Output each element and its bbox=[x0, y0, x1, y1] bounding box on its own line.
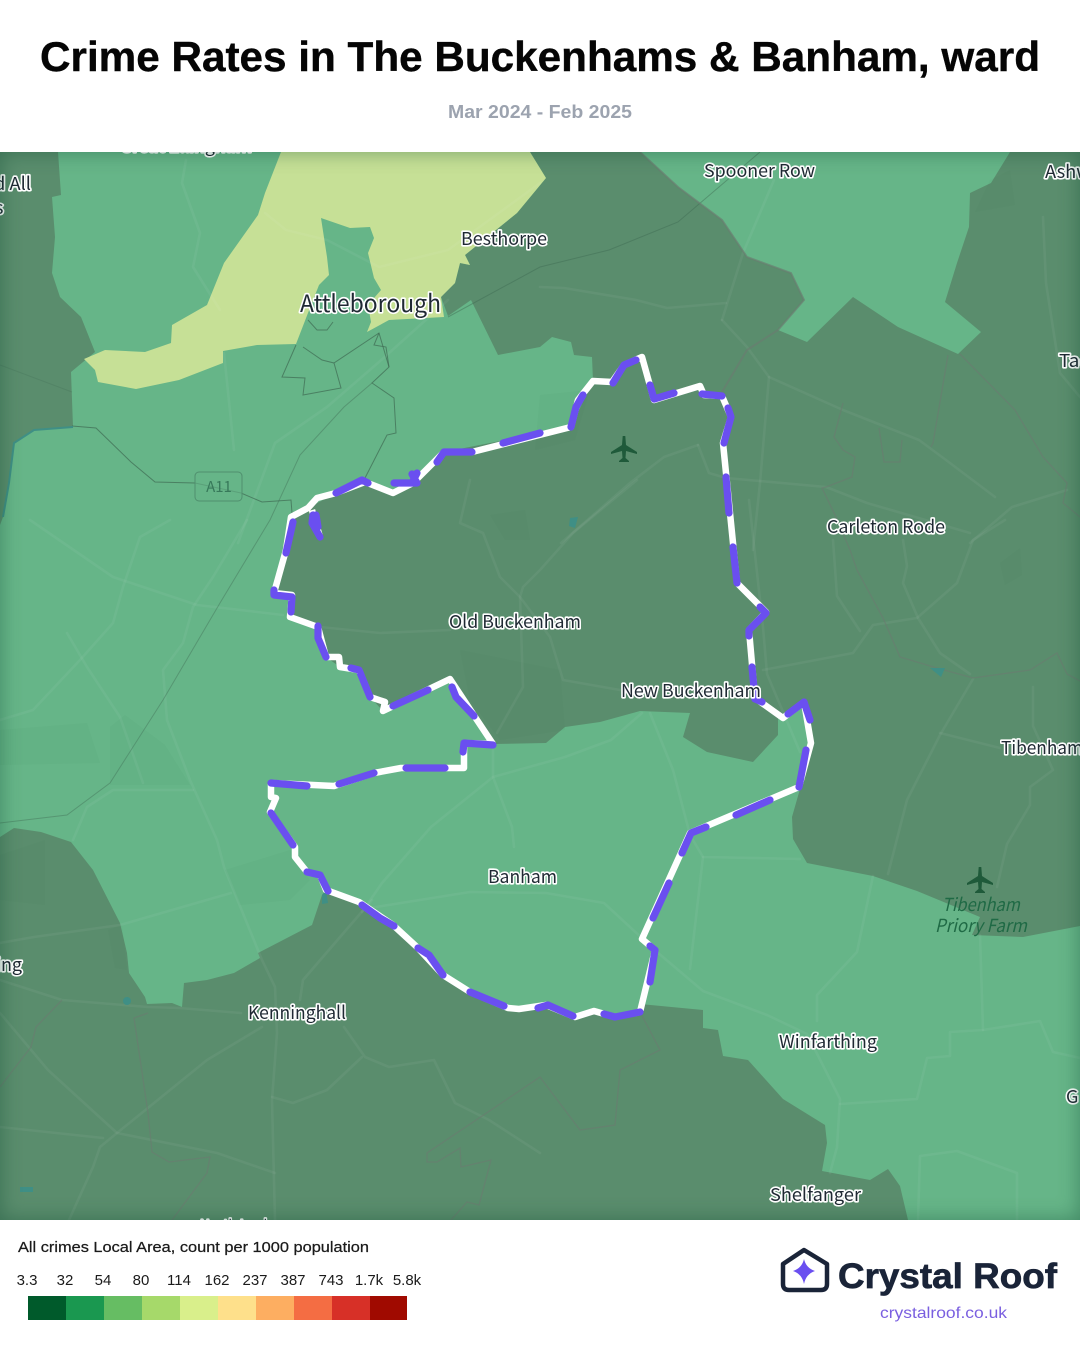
road shield: A11 bbox=[195, 472, 242, 501]
brand url: crystalroof.co.uk bbox=[880, 1305, 1008, 1322]
administrative boundary lines bbox=[0, 152, 760, 823]
place labels: Besthorpe bbox=[461, 225, 547, 251]
icon: airfield at Old Buckenham bbox=[611, 436, 637, 462]
legend scale values: 162 bbox=[204, 1272, 230, 1289]
subtitle: date range: Mar 2024 - Feb 2025 bbox=[448, 102, 632, 122]
place labels: Spooner Row bbox=[704, 157, 815, 183]
place labels: North Lopham bbox=[200, 1213, 292, 1239]
region: north and east high-crime area bbox=[274, 152, 1080, 937]
place labels: Great Ellingham bbox=[120, 132, 252, 158]
icon: airfield at Tibenham Priory Farm bbox=[967, 867, 993, 893]
legend scale values: 3.3 bbox=[17, 1272, 37, 1289]
place labels: Carleton Rode bbox=[827, 513, 945, 539]
label: Tibenham Priory Farm: Priory Farm bbox=[935, 912, 1028, 938]
map edge vignette bbox=[0, 152, 1080, 1220]
legend scale values bbox=[17, 1272, 422, 1289]
place labels: Old Buckenham bbox=[449, 608, 581, 634]
water and river bbox=[3, 427, 945, 1192]
land use patches bbox=[0, 170, 1022, 970]
legend title: All crimes Local Area, count per 1000 population bbox=[18, 1239, 369, 1256]
place labels: Shelfanger bbox=[770, 1181, 862, 1207]
ward outline: purple dashes bbox=[271, 360, 810, 1017]
region: Attleborough low-crime area bbox=[84, 152, 546, 389]
ward outline: white base bbox=[270, 357, 811, 1017]
title: Crime Rates in The Buckenhams & Banham, ward bbox=[40, 33, 1040, 80]
legend scale values: 80 bbox=[133, 1272, 149, 1289]
legend scale values: 387 bbox=[280, 1272, 306, 1289]
brand name: Crystal Roof bbox=[838, 1257, 1057, 1296]
place labels: New Buckenham bbox=[621, 677, 761, 703]
place labels: Banham bbox=[488, 863, 557, 889]
icon: Crystal Roof house logo bbox=[783, 1250, 827, 1290]
region: west high-crime area bbox=[0, 152, 95, 525]
legend scale values: 54 bbox=[95, 1272, 111, 1289]
label: Tibenham Priory Farm bbox=[936, 896, 1028, 936]
label: Tibenham Priory Farm: Tibenham bbox=[942, 891, 1021, 917]
grey ward boundaries in dark areas bbox=[0, 152, 1080, 1220]
region: south high-crime area bbox=[0, 828, 908, 1220]
major and minor roads bbox=[80, 302, 988, 1174]
place labels: G bbox=[1066, 1083, 1078, 1109]
legend scale values: 743 bbox=[318, 1272, 344, 1289]
place labels: Winfarthing bbox=[779, 1028, 877, 1054]
place labels: Kenninghall bbox=[248, 999, 346, 1025]
place labels: Attleborough bbox=[300, 284, 441, 319]
legend scale values: 114 bbox=[167, 1272, 191, 1289]
legend scale values: 237 bbox=[242, 1272, 268, 1289]
legend scale values: 1.7k bbox=[355, 1272, 384, 1289]
legend scale values: 32 bbox=[57, 1272, 73, 1289]
road shield: A11: A11 bbox=[206, 476, 232, 497]
legend colour swatches bbox=[28, 1296, 407, 1320]
legend scale values: 5.8k bbox=[393, 1272, 422, 1289]
